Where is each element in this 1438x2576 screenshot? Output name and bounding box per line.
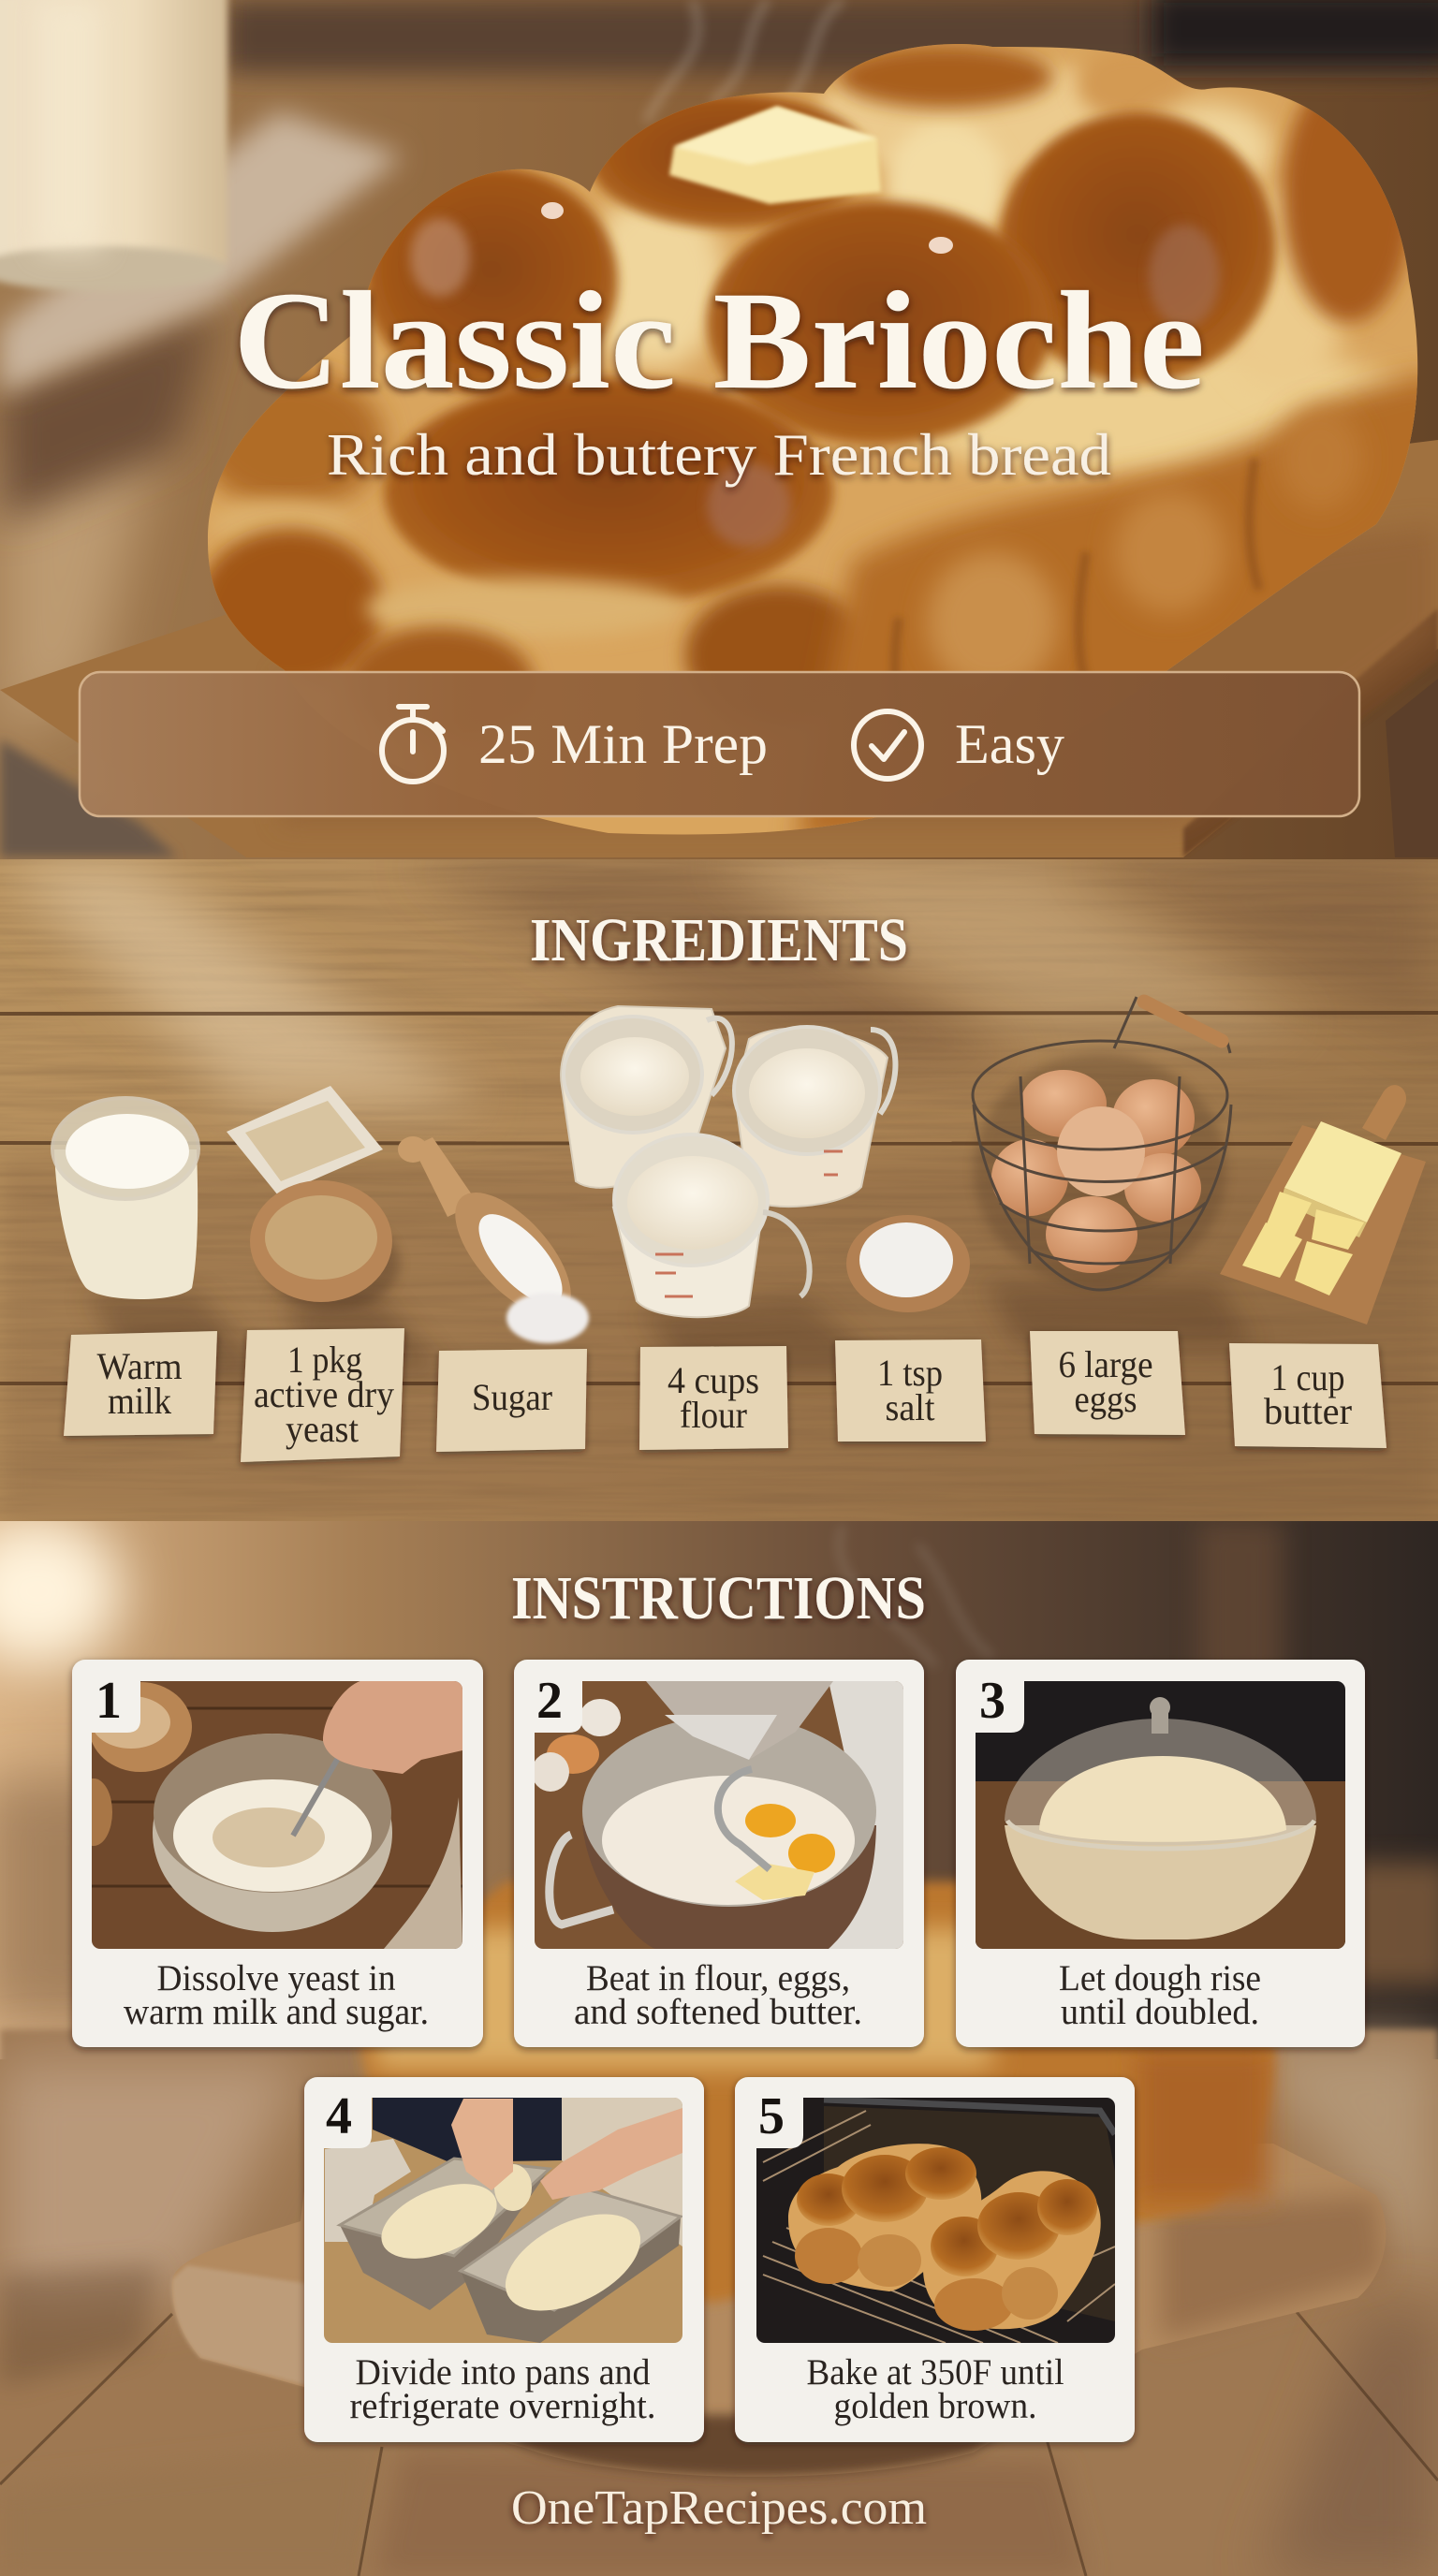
brioche loaf (187, 28, 1438, 852)
ingredient card: butter: butter (1264, 1390, 1352, 1432)
ingredient card: warm milk: milk (108, 1380, 171, 1422)
step card 5 (735, 2077, 1135, 2442)
step 4 text: refrigerate overnight. (350, 2386, 655, 2426)
steam (646, 0, 843, 122)
ingredient card: butter (1229, 1343, 1387, 1448)
step 4 number badge (324, 2087, 372, 2148)
crumb and cream areas (814, 56, 1133, 178)
napkin (0, 111, 403, 394)
step card 3 (956, 1660, 1365, 2047)
step 3 photo: dough rising (976, 1681, 1345, 1949)
step 4 text: Divide into pans and (356, 2352, 651, 2393)
step 4 number badge: 4 (326, 2087, 352, 2145)
step card 4 (304, 2077, 704, 2442)
step 5 text: Bake at 350F until (807, 2352, 1064, 2393)
icon: stopwatch (382, 707, 444, 782)
milk glass (0, 0, 227, 291)
ingredient card: eggs: eggs (1075, 1378, 1137, 1420)
cutting board (0, 440, 1438, 857)
ingredient: sugar scoop (398, 1136, 591, 1343)
ingredient card: salt: 1 tsp (877, 1352, 943, 1394)
panel: hero photo of brioche loaf (0, 0, 1438, 859)
subtitle: Rich and buttery French bread (327, 421, 1111, 488)
stats bar (80, 672, 1359, 816)
step 4 text (350, 2352, 655, 2426)
step 5 text (807, 2352, 1064, 2426)
top buns (838, 45, 1053, 109)
ingredient card: warm milk (64, 1331, 217, 1436)
prep time: 25 Min Prep (478, 713, 768, 775)
ingredient card: flour (639, 1346, 788, 1450)
ingredient card: sugar (436, 1349, 587, 1452)
ingredient: flour measuring cups (561, 1006, 895, 1317)
step 1 text: Dissolve yeast in (157, 1958, 395, 1998)
ingredient card: eggs: 6 large (1058, 1343, 1153, 1385)
steam (839, 1526, 992, 1666)
step card 1 (72, 1660, 483, 2047)
panel: instructions (0, 1516, 1438, 2576)
step 5 text: golden brown. (833, 2386, 1037, 2426)
ingredient card: flour: 4 cups (668, 1359, 759, 1401)
wood table (0, 2029, 1438, 2576)
heading: instructions: INSTRUCTIONS (511, 1564, 926, 1632)
ingredient card: butter: 1 cup (1271, 1356, 1344, 1398)
title: Classic Brioche (233, 263, 1205, 418)
ingredient card: warm milk: Warm (97, 1345, 182, 1387)
ingredient: egg basket (973, 997, 1231, 1290)
step card 2 (514, 1660, 924, 2047)
loaf left (788, 2144, 981, 2291)
ingredient card: yeast: yeast (286, 1408, 359, 1450)
ingredient card: flour: flour (680, 1394, 747, 1436)
ingredient: milk glass (52, 1098, 198, 1299)
ingredient card: sugar: Sugar (472, 1376, 552, 1418)
cutting board (172, 2144, 1386, 2477)
footer website: OneTapRecipes.com (511, 2481, 927, 2535)
step 1 text (124, 1958, 429, 2032)
ingredient card: salt (835, 1339, 986, 1442)
ingredient: yeast bowl (250, 1180, 400, 1310)
ingredient card: salt: salt (886, 1386, 934, 1428)
ingredient: butter on board (1220, 1085, 1426, 1325)
difficulty: Easy (955, 713, 1064, 775)
step 3 text: until doubled. (1061, 1992, 1259, 2032)
step 2 text (574, 1958, 862, 2032)
ingredient card: yeast: active dry (254, 1373, 394, 1415)
butter pat (669, 107, 881, 204)
ingredient: yeast packet (227, 1086, 383, 1195)
step 1 photo: dissolving yeast (75, 1681, 462, 1949)
panel: ingredients (0, 859, 1438, 1521)
step 3 number badge: 3 (979, 1672, 1005, 1730)
ingredient: salt bowl (846, 1215, 970, 1312)
ingredient card: yeast (241, 1328, 404, 1462)
step 2 photo: stand mixer (532, 1681, 903, 1949)
step 3 number badge (976, 1672, 1024, 1733)
blurred loaf (360, 1881, 1275, 2303)
step 2 number badge (535, 1672, 582, 1733)
step 5 number badge (756, 2087, 803, 2148)
ingredient card: yeast: 1 pkg (287, 1339, 362, 1381)
step 5 photo: loaves in oven (756, 2098, 1115, 2343)
step 3 text: Let dough rise (1059, 1958, 1261, 1998)
lower right crust band (796, 374, 1438, 842)
step 2 text: Beat in flour, eggs, (586, 1958, 850, 1998)
step 4 photo: loaf pans (324, 2098, 682, 2343)
step 5 number badge: 5 (758, 2087, 785, 2145)
step 3 text (1059, 1958, 1261, 2032)
step 1 text: warm milk and sugar. (124, 1992, 429, 2032)
icon: check circle (854, 711, 921, 779)
gloss highlights (410, 218, 470, 297)
lower buns (384, 377, 833, 606)
step 1 number badge (92, 1672, 140, 1733)
loaf right (923, 2171, 1101, 2329)
step 2 text: and softened butter. (574, 1992, 862, 2032)
step 2 number badge: 2 (536, 1672, 563, 1730)
heading: ingredients: INGREDIENTS (530, 906, 908, 974)
ingredient card: eggs (1030, 1331, 1185, 1435)
step 1 number badge: 1 (95, 1672, 122, 1730)
